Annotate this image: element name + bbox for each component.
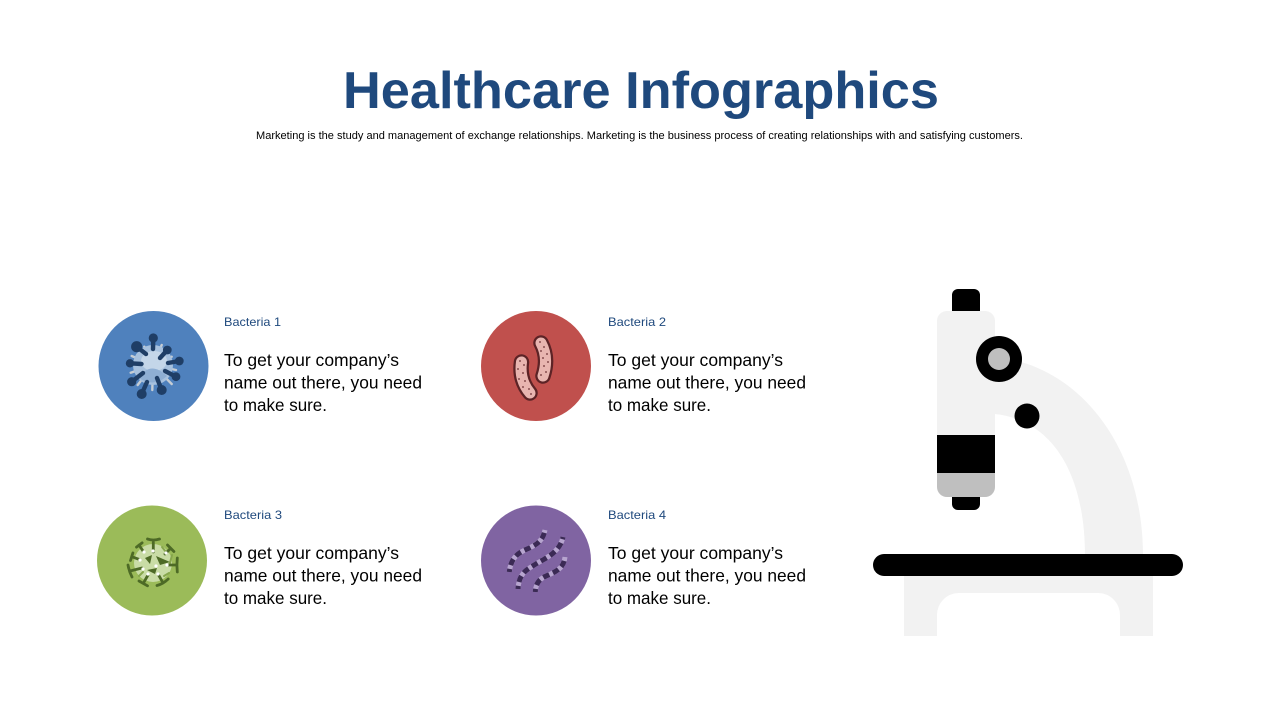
label: bacteria 3: Bacteria 3: [224, 508, 282, 522]
microscope objective band: [937, 435, 995, 473]
microscope stage: [873, 554, 1183, 576]
microscope top knob: [952, 289, 980, 319]
text block: bacteria 1: [224, 350, 422, 415]
text block: bacteria 3: To get your company’s: [224, 543, 399, 563]
text block: bacteria 4: [608, 543, 806, 608]
text block: bacteria 4: to make sure.: [608, 588, 711, 608]
label: bacteria 1: Bacteria 1: [224, 315, 281, 329]
text block: bacteria 2: to make sure.: [608, 395, 711, 415]
microscope eyepiece wheel: [976, 336, 1022, 382]
label: bacteria 2: Bacteria 2: [608, 315, 666, 329]
microscope arm: [995, 355, 1143, 556]
text block: bacteria 4: To get your company’s: [608, 543, 783, 563]
microscope tube: [937, 311, 995, 435]
icon: green virus: [97, 506, 207, 616]
text block: bacteria 2: To get your company’s: [608, 350, 783, 370]
icon: purple spirilla: [481, 506, 591, 616]
text block: bacteria 1: To get your company’s: [224, 350, 399, 370]
microscope base: [904, 574, 1153, 636]
microscope bottom knob: [952, 485, 980, 510]
subtitle: Marketing is the study and management of exchange relationships. Marketing is the business process of creating relationships with and satisfying customers.: [256, 130, 1023, 142]
text block: bacteria 3: [224, 543, 422, 608]
icon: microscope: [873, 289, 1183, 636]
text block: bacteria 2: [608, 350, 806, 415]
panel: bacteria 1: [98, 311, 422, 421]
text block: bacteria 1: to make sure.: [224, 395, 327, 415]
panel: bacteria 3: [97, 506, 422, 616]
label: bacteria 4: Bacteria 4: [608, 508, 666, 522]
text block: bacteria 1: name out there, you need: [224, 372, 422, 392]
text block: bacteria 3: name out there, you need: [224, 566, 422, 586]
title: Healthcare Infographics: [343, 62, 939, 120]
icon: blue virus: [98, 311, 208, 421]
text block: bacteria 4: name out there, you need: [608, 566, 806, 586]
icon: red bacilli: [481, 311, 591, 421]
text block: bacteria 2: name out there, you need: [608, 372, 806, 392]
text block: bacteria 3: to make sure.: [224, 588, 327, 608]
panel: bacteria 4: [481, 506, 806, 616]
microscope lens: [937, 473, 995, 497]
panel: bacteria 2: [481, 311, 806, 421]
microscope focus knob: [1014, 404, 1040, 428]
